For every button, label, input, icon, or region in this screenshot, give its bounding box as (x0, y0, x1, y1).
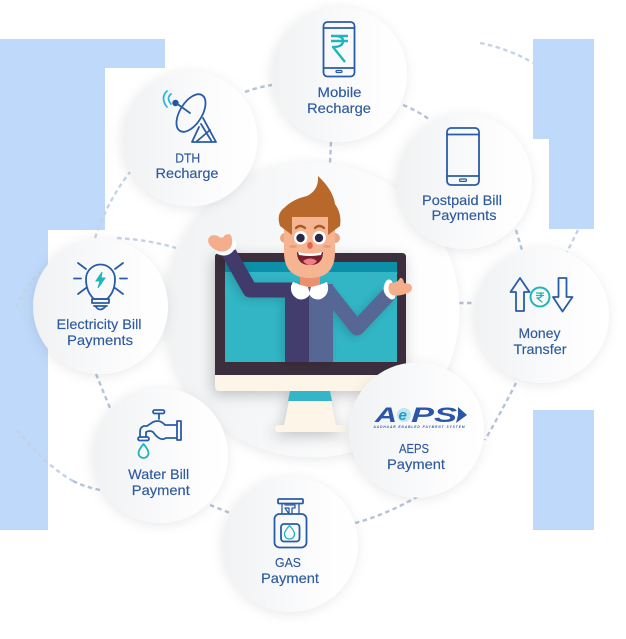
logo: AePS: e (398, 407, 407, 424)
eyes (294, 231, 326, 244)
label: DTH (175, 152, 200, 166)
background: right lower blue block (533, 410, 594, 530)
monitor stand (275, 391, 346, 432)
mouth (297, 252, 323, 265)
label: Mobile (318, 84, 362, 100)
label: Water Bill (128, 466, 189, 482)
card: AEPS Payment (349, 362, 484, 498)
icon: phone with rupee (324, 22, 354, 76)
label: Transfer (514, 341, 567, 357)
label (422, 192, 502, 223)
label (307, 84, 371, 116)
card: Mobile Recharge (272, 7, 407, 142)
label: GAS (275, 556, 301, 570)
label: Electricity Bill (56, 316, 142, 332)
logo: AePS: AADHAAR ENABLED PAYMENT SYSTEM (372, 425, 465, 429)
icon: light bulb (74, 263, 127, 310)
label: Payment (261, 570, 319, 586)
icon: satellite dish (164, 89, 216, 142)
logo: AePS (372, 404, 467, 429)
nose (307, 242, 313, 249)
label (128, 466, 190, 498)
monitor (215, 253, 406, 432)
card: Electricity Bill Payments (33, 239, 168, 374)
character body and arms (229, 253, 391, 362)
label (261, 556, 319, 586)
screen top band (225, 262, 397, 272)
label (387, 442, 445, 472)
neck (300, 275, 320, 287)
label: Payments (432, 207, 496, 223)
icon: gas cylinder (274, 499, 306, 548)
label: Recharge (156, 165, 219, 181)
icon: smartphone (447, 128, 479, 185)
background: left blue block (0, 39, 165, 530)
dashed connector network (16, 43, 578, 523)
icon: arrows with rupee coin (510, 278, 572, 312)
left cuff and hand (208, 234, 233, 252)
label (56, 316, 142, 348)
label (514, 325, 567, 357)
right cuff and hand (387, 278, 412, 296)
monitor frame (215, 253, 406, 375)
background: right upper blue block (533, 39, 594, 229)
center circle (164, 162, 460, 458)
monitor screen (225, 262, 397, 362)
cheeks (289, 245, 297, 248)
label: Payments (67, 332, 133, 348)
card: Postpaid Bill Payments (397, 114, 532, 249)
icon: water tap (138, 410, 181, 458)
logo: AePS: PS (411, 404, 457, 427)
logo: AePS: A (374, 404, 397, 427)
monitor chin (215, 374, 406, 391)
card: Water Bill Payment (93, 388, 228, 523)
label: Recharge (307, 100, 371, 116)
label: Postpaid Bill (422, 192, 502, 208)
card: Money Transfer (474, 248, 609, 383)
character (208, 176, 412, 362)
label (156, 152, 219, 181)
eyebrows (296, 226, 324, 228)
label: Money (518, 325, 560, 341)
head (280, 215, 340, 278)
card: DTH Recharge (122, 72, 258, 206)
label: Payment (132, 482, 190, 498)
label: AEPS (399, 442, 429, 456)
label: Payment (387, 456, 445, 472)
hair (279, 176, 340, 235)
card: GAS Payment (223, 477, 358, 612)
collar (291, 282, 328, 299)
